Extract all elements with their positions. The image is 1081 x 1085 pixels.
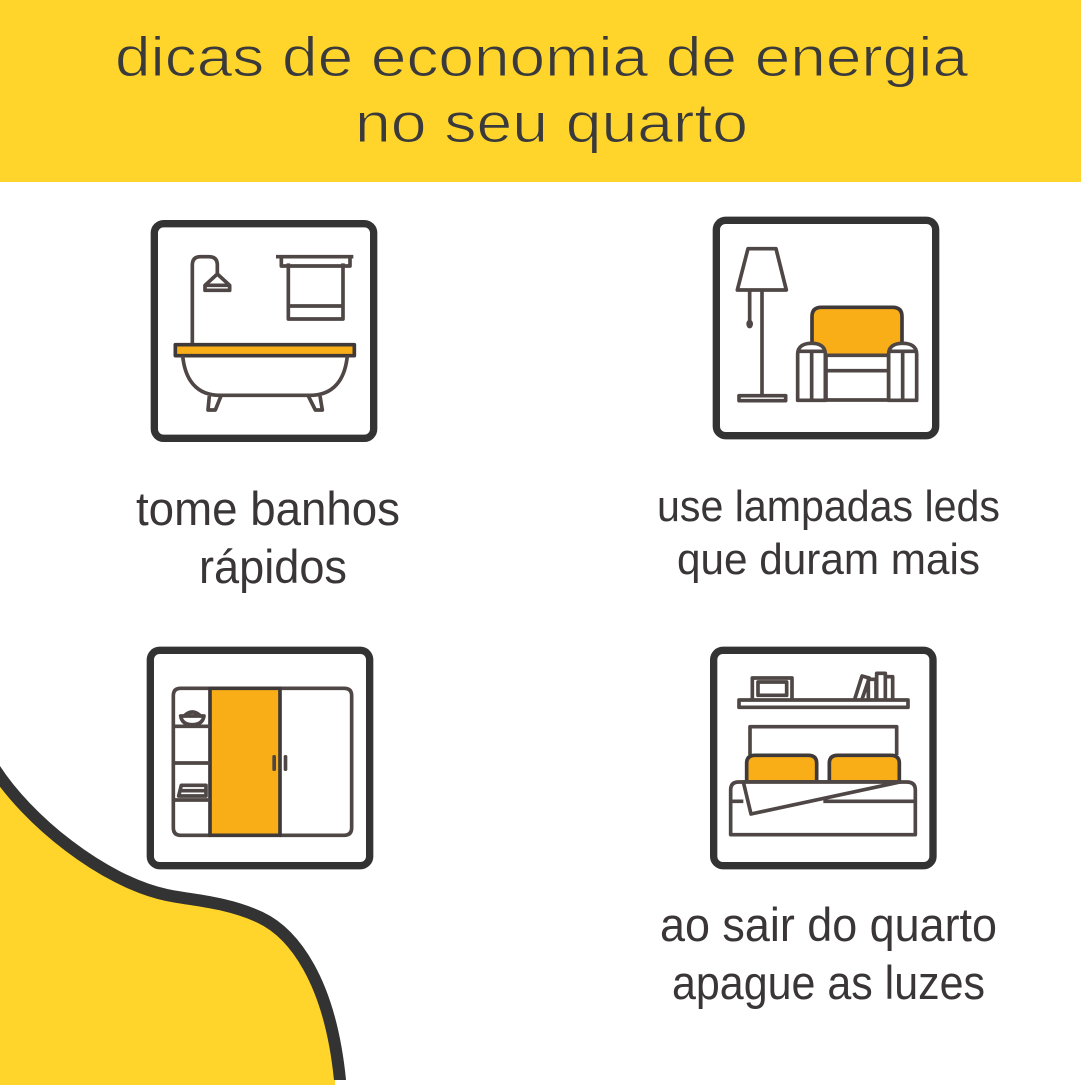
panel: LED lamp tip [657, 220, 1000, 584]
icon: wardrobe [150, 650, 370, 866]
caption: ao sair do quarto [660, 898, 997, 951]
panel: lights-off tip [660, 650, 997, 1009]
title [115, 25, 969, 154]
caption: que duram mais [677, 535, 980, 584]
caption: tome banhos [136, 482, 400, 535]
caption [136, 482, 400, 593]
icon: bathtub and shower [154, 224, 374, 438]
title: dicas de economia de energia [115, 25, 969, 88]
panel: bath tip [136, 224, 400, 593]
icon: floor lamp and armchair [716, 220, 936, 436]
header band [0, 0, 1081, 182]
caption: rápidos [199, 540, 347, 593]
panel: wardrobe tip [150, 650, 370, 866]
corner wave decoration [0, 767, 341, 1085]
icon: bed with shelf [714, 650, 933, 866]
caption: use lampadas leds [657, 482, 1000, 531]
caption: apague as luzes [672, 956, 985, 1009]
caption [657, 482, 1000, 584]
title: no seu quarto [355, 91, 748, 154]
caption [660, 898, 997, 1009]
